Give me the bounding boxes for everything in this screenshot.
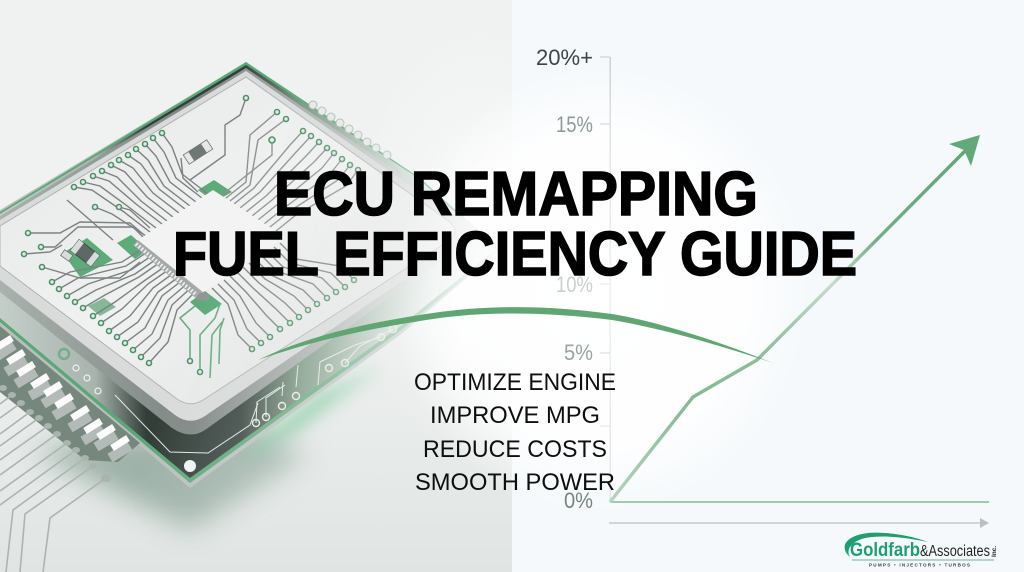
chip solder blob <box>196 293 210 301</box>
logo wordmark green: Goldfarb <box>850 540 920 561</box>
silkscreen marks <box>73 365 101 394</box>
PCB edge vias <box>252 326 396 426</box>
connector pin backing <box>0 326 140 462</box>
title: ECU REMAPPING <box>274 160 758 229</box>
benefits list: REDUCE COSTS <box>423 436 607 463</box>
y axis labels: 10% <box>556 272 593 297</box>
y axis labels: 15% <box>556 112 593 137</box>
lid surface <box>0 77 455 404</box>
green pad under capacitor <box>63 238 113 277</box>
title <box>173 160 857 289</box>
title: FUEL EFFICIENCY GUIDE <box>173 220 857 289</box>
background: right half <box>512 0 1024 572</box>
board shadow <box>30 420 310 530</box>
benefits list: SMOOTH POWER <box>415 469 615 496</box>
traces lower-left <box>52 247 197 363</box>
green area bottom of chip <box>190 291 222 315</box>
traces upper-left <box>67 98 246 240</box>
chart: fuel efficiency growth <box>536 45 989 528</box>
mounting pad <box>59 349 69 359</box>
y axis labels: 5% <box>564 340 593 365</box>
background: left half <box>0 0 512 572</box>
connector pin highlights <box>0 338 128 448</box>
green area top of chip <box>198 180 232 197</box>
lid highlight band <box>0 71 398 421</box>
growth line <box>610 150 966 502</box>
logo tagline: PUMPS • INJECTORS • TURBOS <box>869 562 970 568</box>
benefits list: OPTIMIZE ENGINE <box>414 369 616 396</box>
logo swoosh <box>845 533 928 557</box>
lid outer band <box>0 68 476 435</box>
traces left <box>24 222 150 278</box>
chip pin row lower-left <box>136 244 199 297</box>
logo inc: Inc. <box>991 546 998 557</box>
traces lower-right <box>212 243 354 349</box>
green area lower-left <box>88 298 116 316</box>
mounting hole <box>184 460 196 472</box>
y axis <box>610 57 611 502</box>
small resistor <box>61 250 73 261</box>
green pcb edge <box>0 62 500 483</box>
pcb recessed surface <box>0 65 495 478</box>
background: left light haze <box>350 20 610 460</box>
y axis ticks <box>600 57 610 426</box>
chip shadow pins <box>133 240 208 300</box>
connector tabs top-right <box>309 101 391 159</box>
background: white glow right of centre <box>390 65 810 515</box>
pin leads <box>0 395 106 572</box>
benefits list: IMPROVE MPG <box>430 402 600 429</box>
lead solder feet <box>0 385 111 482</box>
PCB traces on lower-right edge <box>115 329 393 453</box>
y axis labels <box>536 45 593 513</box>
capacitor upper <box>183 140 213 164</box>
board base <box>0 62 500 488</box>
y axis labels: 20%+ <box>536 45 593 70</box>
benefits list <box>414 369 616 496</box>
green glow <box>249 368 374 455</box>
chip body <box>138 190 285 292</box>
logo: Goldfarb & Associates <box>845 533 998 568</box>
green swoosh <box>258 307 773 363</box>
traces bottom green <box>180 304 224 378</box>
y axis labels: 0% <box>564 488 593 513</box>
baseline <box>610 501 989 503</box>
logo wordmark dark: &Associates <box>920 543 990 560</box>
traces upper-right <box>222 112 358 231</box>
capacitor lower <box>70 239 100 267</box>
x axis arrow <box>609 518 989 528</box>
green area left of chip <box>117 235 143 259</box>
logo rule <box>852 559 994 561</box>
circuit board illustration <box>0 62 500 572</box>
via pads <box>22 96 360 374</box>
growth arrowhead <box>949 135 980 166</box>
connector pin bodies <box>0 345 130 458</box>
